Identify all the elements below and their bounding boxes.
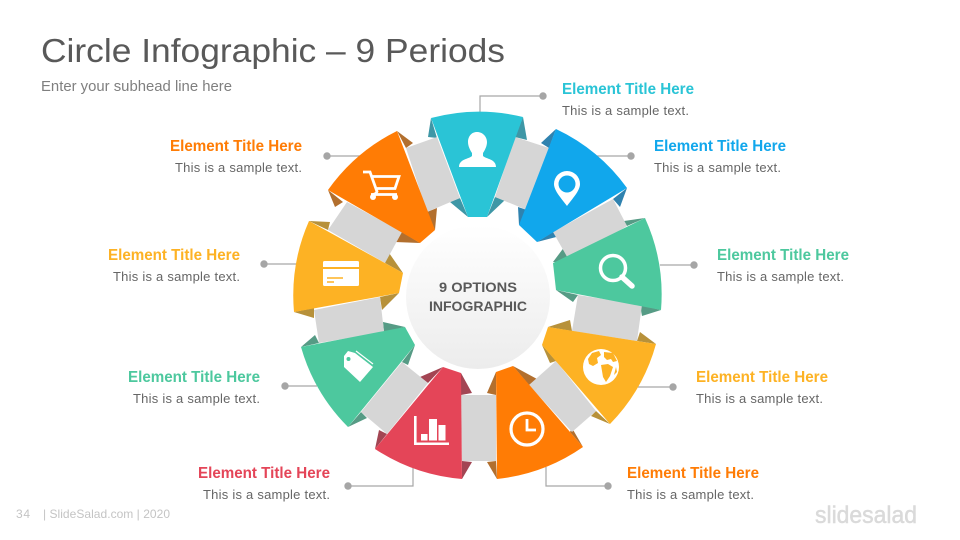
segment: orange with clock icon [496,366,583,479]
label: blue element: This is a sample text. [654,160,781,175]
icon: magnifier [600,256,632,286]
segment: red with bar chart icon [375,367,462,479]
center circle: 9 OPTIONS [439,279,517,295]
gray connector bands [314,137,642,461]
label: green right element: This is a sample text. [717,269,844,284]
label: orange top element: This is a sample text. [175,160,302,175]
label: yellow left element: This is a sample text. [113,269,240,284]
icon: clock [511,413,543,445]
label: teal element: Element Title Here [562,81,694,98]
label: blue element: Element Title Here [654,138,786,155]
segment: orange with cart icon [328,131,435,243]
label: orange bottom element: This is a sample text. [627,487,754,502]
segment: yellow with globe icon [542,327,656,424]
segment: green with tag icon [301,327,415,427]
icon: globe [583,349,619,385]
icon: person [459,132,496,167]
label: teal element [562,81,694,118]
label: yellow left element [108,247,240,284]
label: orange top element: Element Title Here [170,138,302,155]
label: yellow right element: This is a sample text. [696,391,823,406]
label: green left element: Element Title Here [128,369,260,386]
icon: price tag [344,351,373,382]
label: red element [198,465,330,502]
label: yellow right element: Element Title Here [696,369,828,386]
label: green right element [717,247,849,284]
label: red element: Element Title Here [198,465,330,482]
label: green left element: This is a sample text. [133,391,260,406]
label: red element: This is a sample text. [203,487,330,502]
center circle: INFOGRAPHIC [429,298,527,314]
icon: shopping cart [363,172,399,200]
label: teal element: This is a sample text. [562,103,689,118]
label: green right element: Element Title Here [717,247,849,264]
segment: yellow with card icon [293,221,403,312]
logo: slidesalad [815,502,917,529]
segment: teal with person icon [431,112,523,217]
fold shadows [294,117,661,479]
label: green left element [128,369,260,406]
segment: blue with pin icon [519,129,627,242]
icon: credit card [323,261,359,286]
footer: | SlideSalad.com | 2020 [43,507,170,521]
label: yellow left element: Element Title Here [108,247,240,264]
label: yellow right element [696,369,828,406]
center circle [406,225,550,369]
footer: 34 [16,507,30,521]
subtitle: Enter your subhead line here [41,79,232,95]
icon: map pin [554,171,580,206]
label: orange bottom element: Element Title Here [627,465,759,482]
icon: bar chart [414,416,449,445]
label: orange bottom element [627,465,759,502]
label: blue element [654,138,786,175]
label: orange top element [170,138,302,175]
title: Circle Infographic – 9 Periods [41,32,505,69]
segment: green with magnifier icon [553,218,662,310]
connector lines and dots [260,92,698,490]
